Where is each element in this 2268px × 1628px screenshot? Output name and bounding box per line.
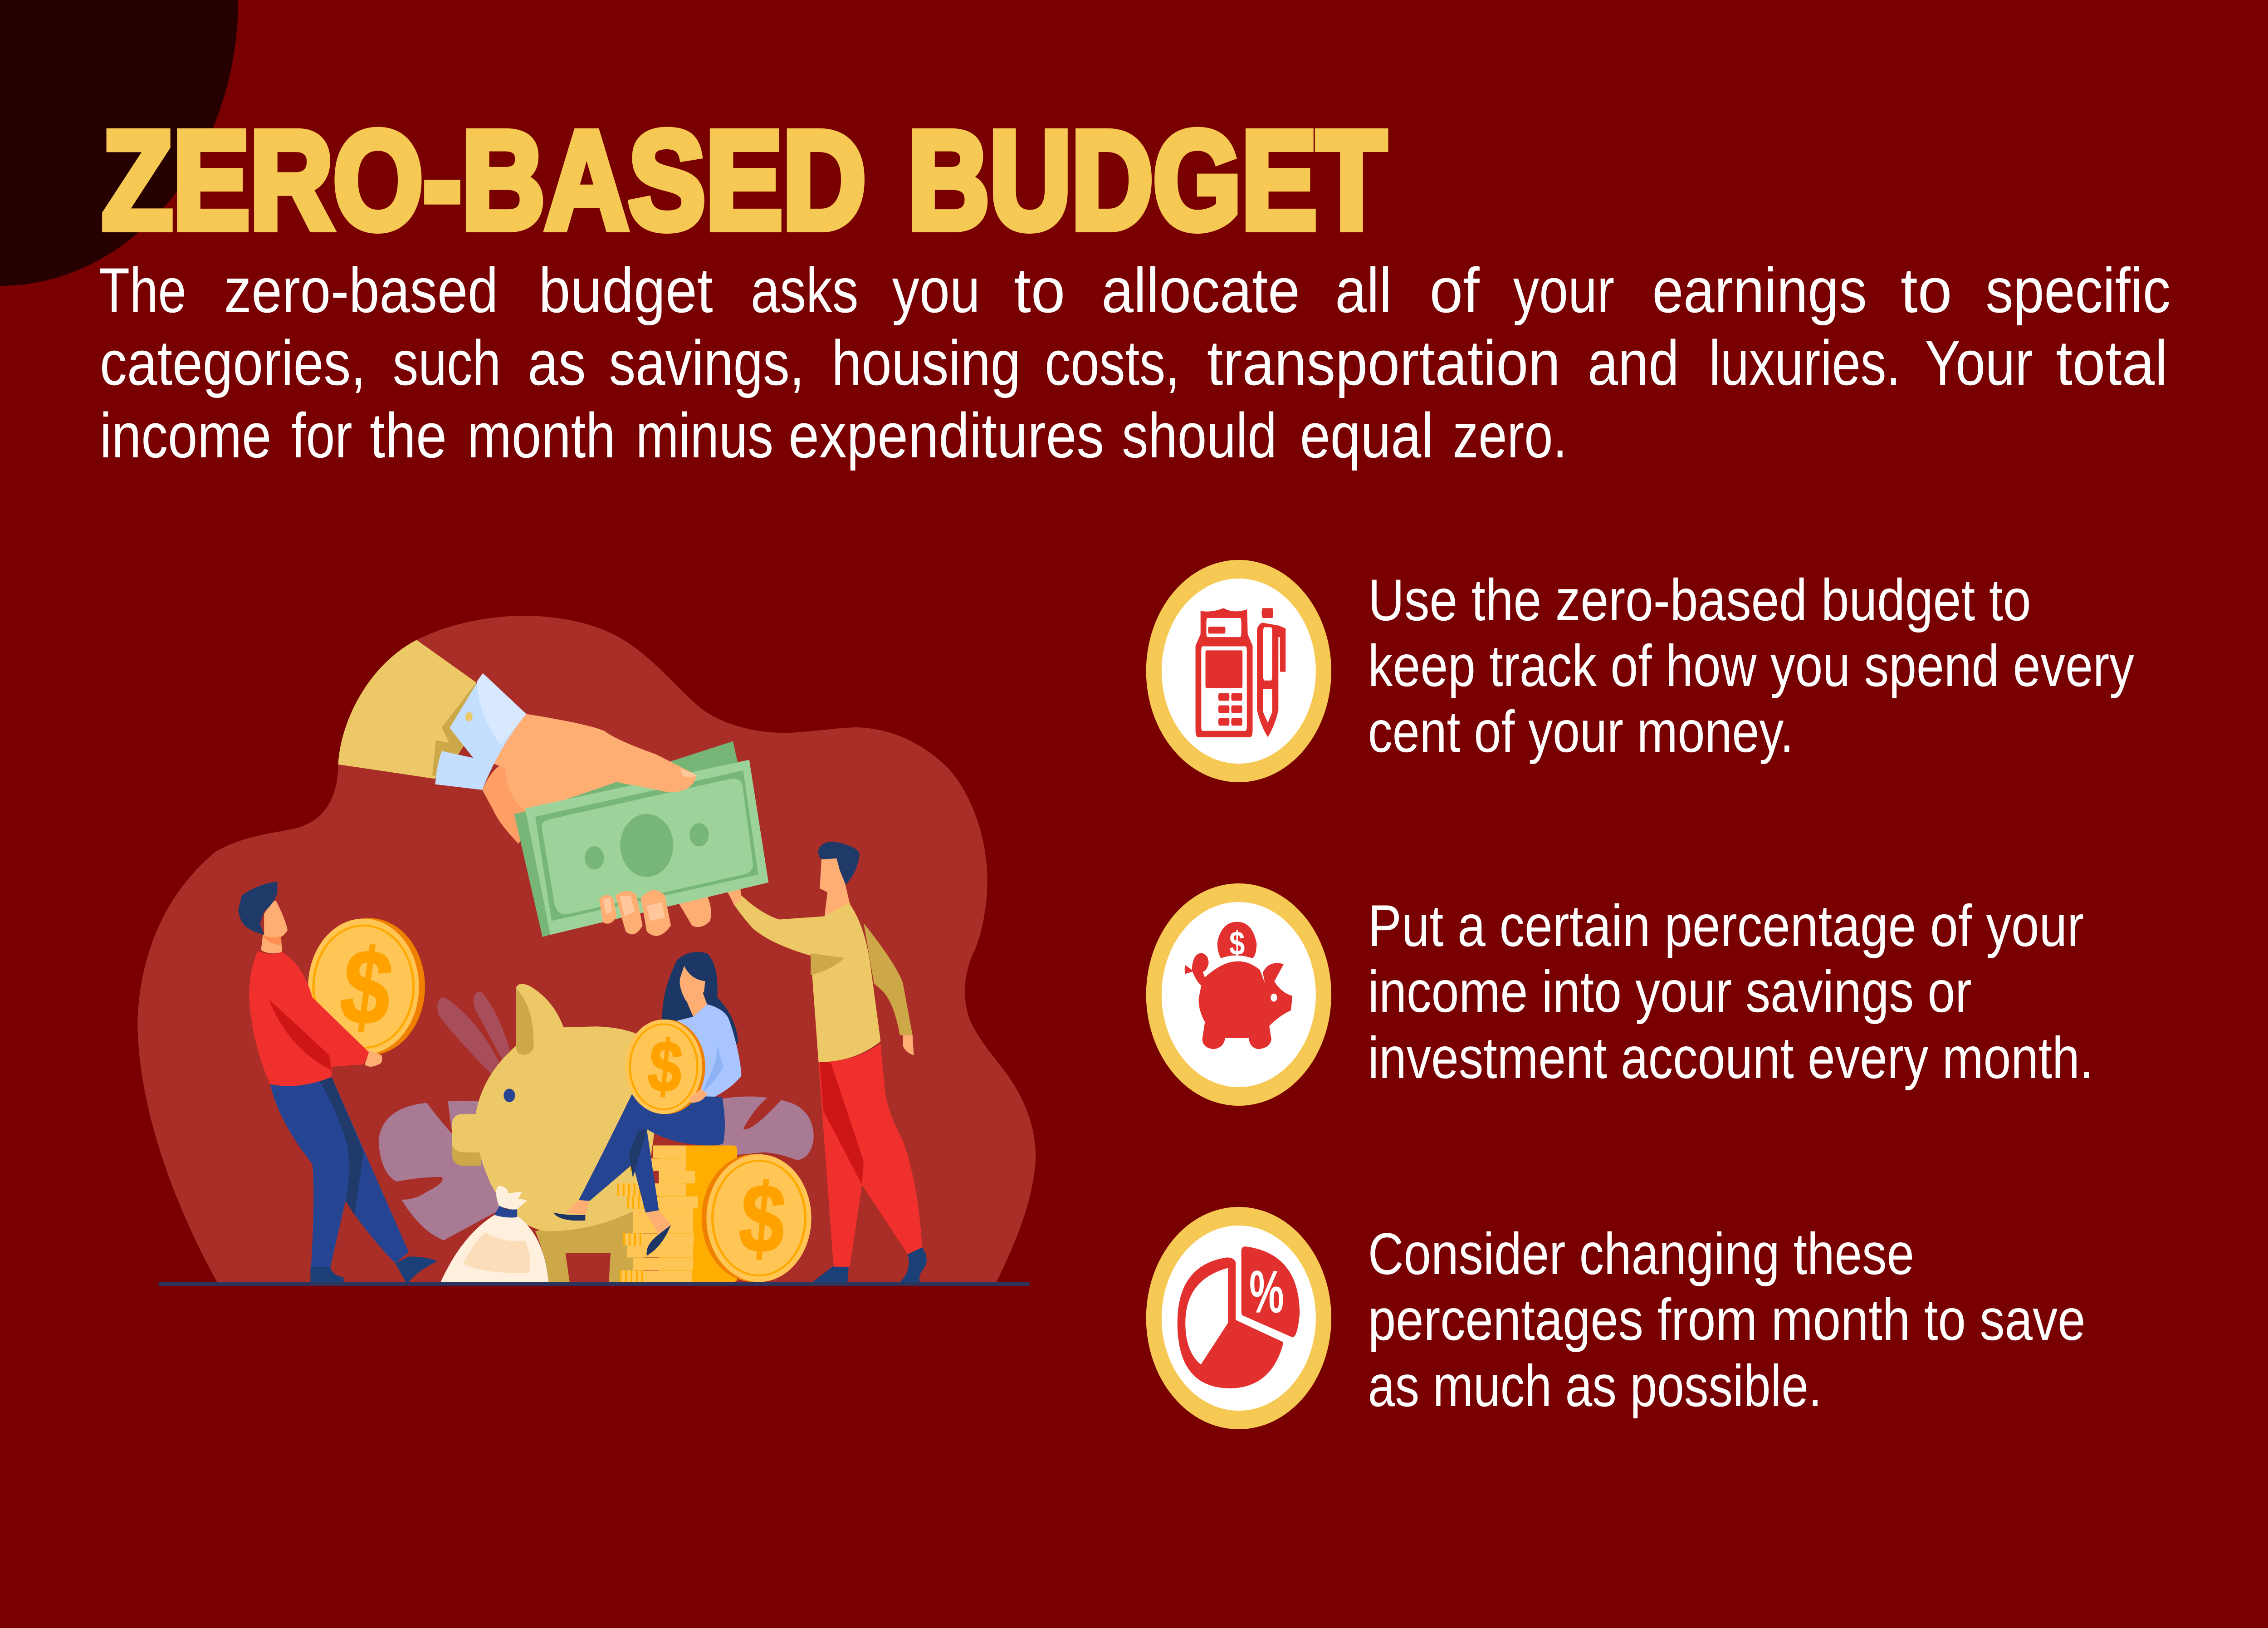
intro paragraph: as xyxy=(528,328,586,398)
intro paragraph: zero-based xyxy=(224,255,498,326)
title: BUDGET xyxy=(908,102,1386,258)
title xyxy=(102,102,1386,258)
banknote xyxy=(514,805,577,937)
tip 3 text xyxy=(1368,1221,2086,1419)
tip 2 text: investment account every month. xyxy=(1368,1025,2093,1091)
large coin at bottom right xyxy=(702,1154,811,1282)
tip 3 text: Consider changing these xyxy=(1368,1221,1914,1287)
woman with coin: $ xyxy=(645,1025,686,1108)
large coin at bottom right: $ xyxy=(735,1163,790,1274)
money bag xyxy=(440,1186,548,1282)
intro paragraph xyxy=(99,255,2170,471)
title: ZERO-BASED xyxy=(102,102,866,258)
big hand passing banknotes xyxy=(338,640,768,937)
intro paragraph: categories, xyxy=(100,328,366,398)
decorative dark corner circle xyxy=(0,0,238,286)
tip 2 text: Put a certain percentage of your xyxy=(1368,893,2084,959)
tip 1 text: cent of your money. xyxy=(1368,699,1794,765)
tip 3 text: as much as possible. xyxy=(1368,1353,1822,1419)
icon: pie chart with percent xyxy=(1146,1207,1331,1429)
background blob xyxy=(137,616,1036,1282)
icon: piggy bank with dollar coin xyxy=(1146,883,1331,1106)
fingers behind banknote xyxy=(677,895,711,927)
illustration: people saving money around a piggy bank xyxy=(137,616,1036,1286)
intro paragraph: transportation xyxy=(1207,328,1560,398)
intro paragraph: Your xyxy=(1925,328,2033,398)
intro paragraph: housing xyxy=(831,328,1021,398)
fingers in front of banknote xyxy=(599,895,616,924)
intro paragraph: equal xyxy=(1300,400,1433,471)
intro paragraph: you xyxy=(892,255,980,326)
icon: piggy bank with dollar coin: $ xyxy=(1229,925,1245,962)
stack of coins xyxy=(617,1145,737,1282)
intro paragraph: total xyxy=(2056,328,2168,398)
intro paragraph: allocate xyxy=(1101,255,1300,326)
intro paragraph: asks xyxy=(751,255,858,326)
ground line xyxy=(159,1282,1030,1286)
intro paragraph: such xyxy=(393,328,501,398)
intro paragraph: for xyxy=(291,400,352,471)
icon: payment terminal and pen xyxy=(1146,560,1331,782)
intro paragraph: zero. xyxy=(1453,400,1567,471)
intro paragraph: all xyxy=(1335,255,1392,326)
tip 1 text xyxy=(1368,568,2134,765)
intro paragraph: income xyxy=(100,400,271,471)
man on left carrying coin: $ xyxy=(334,926,399,1048)
piggy bank xyxy=(452,984,656,1282)
intro paragraph: earnings xyxy=(1652,255,1867,326)
intro paragraph: month xyxy=(467,400,616,471)
intro paragraph: to xyxy=(1014,255,1065,326)
tip 1 text: keep track of how you spend every xyxy=(1368,633,2134,699)
man on right reaching for cash xyxy=(722,842,927,1282)
icon: pie chart with percent: % xyxy=(1249,1258,1284,1325)
intro paragraph: and xyxy=(1588,328,1679,398)
intro paragraph: the xyxy=(370,400,447,471)
intro paragraph: costs, xyxy=(1045,328,1180,398)
tip 2 text xyxy=(1368,893,2093,1091)
intro paragraph: expenditures xyxy=(788,400,1104,471)
intro paragraph: budget xyxy=(539,255,713,326)
intro paragraph: The xyxy=(99,255,186,326)
intro paragraph: savings, xyxy=(609,328,804,398)
intro paragraph: should xyxy=(1122,400,1277,471)
tip 2 text: income into your savings or xyxy=(1368,959,1972,1025)
intro paragraph: specific xyxy=(1986,255,2170,326)
intro paragraph: luxuries. xyxy=(1709,328,1901,398)
man on left carrying coin xyxy=(238,882,438,1282)
intro paragraph: to xyxy=(1901,255,1952,326)
woman with coin xyxy=(553,952,741,1255)
intro paragraph: your xyxy=(1513,255,1614,326)
thumb on top of banknote xyxy=(616,761,697,792)
tip 3 text: percentages from month to save xyxy=(1368,1287,2086,1353)
tip 1 text: Use the zero-based budget to xyxy=(1368,568,2031,633)
tropical leaves behind pig xyxy=(379,992,814,1241)
intro paragraph: minus xyxy=(636,400,773,471)
intro paragraph: of xyxy=(1430,255,1480,326)
